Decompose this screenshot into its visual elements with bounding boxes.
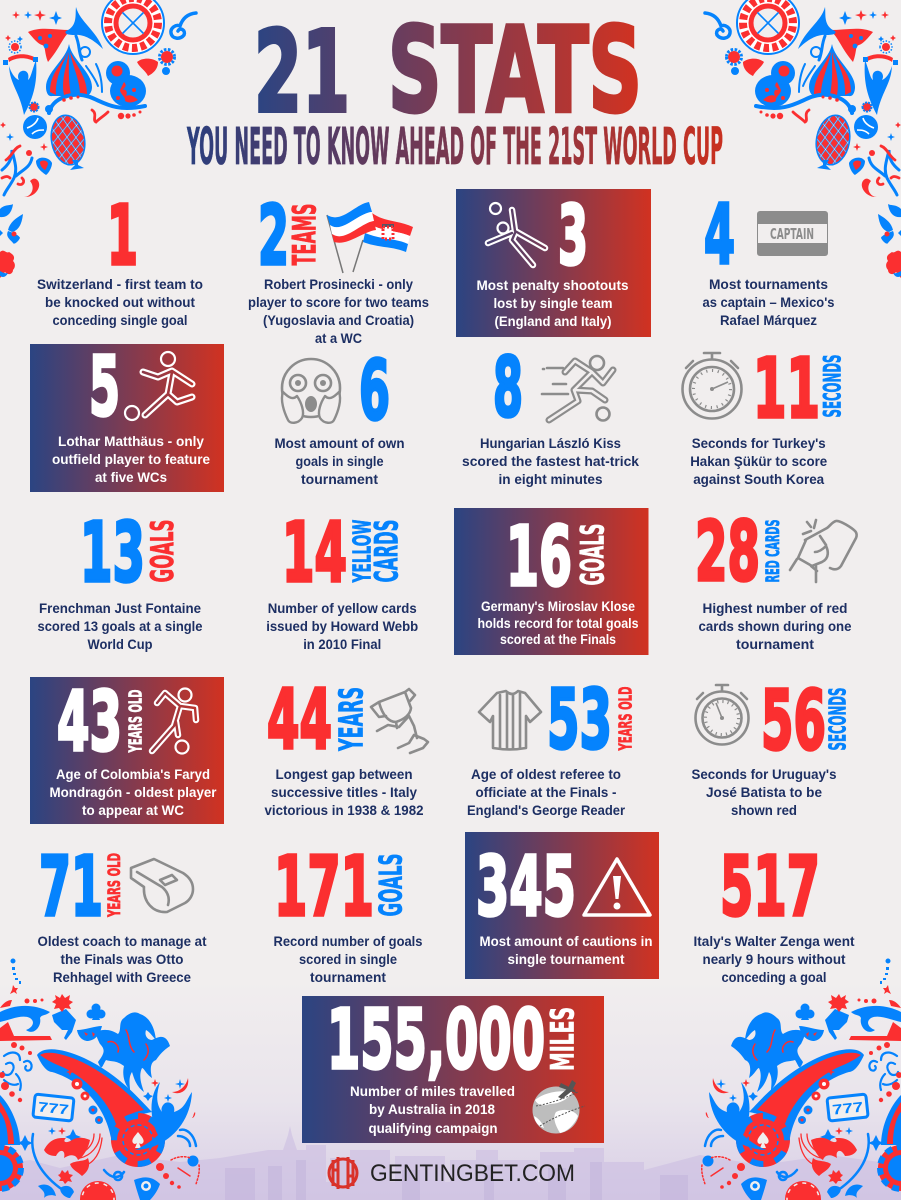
- panel background: [454, 508, 648, 655]
- caption: [264, 766, 424, 818]
- label: yellow cards: YELLOW: [348, 519, 376, 583]
- icon: roulette and dome edge: [0, 1095, 73, 1198]
- city skyline background: [0, 980, 901, 1200]
- caption: Number of yellow cards: [268, 600, 417, 616]
- icon: screaming face: [282, 359, 340, 423]
- logo: GentingBet: [329, 1157, 575, 1189]
- stat 71: [38, 840, 207, 985]
- caption: [462, 435, 639, 487]
- number: 11: 11: [753, 342, 820, 437]
- icon: decorated egg: [47, 113, 89, 170]
- number: 3: 3: [558, 189, 588, 284]
- number: 517: 517: [720, 840, 820, 935]
- caption: Age of Colombia's Faryd: [56, 766, 210, 782]
- caption: Age of oldest referee to: [471, 766, 621, 782]
- icon: fish and flower: [137, 50, 174, 76]
- ornament: bottom right folk-art cluster: [702, 958, 901, 1200]
- stat 1: [37, 189, 203, 328]
- title: 21 STATS: STATS: [388, 1, 642, 139]
- stat 6: [274, 344, 404, 487]
- caption: shown red: [731, 802, 797, 818]
- caption: [702, 276, 835, 328]
- caption: nearly 9 hours without: [702, 951, 846, 967]
- title: 21 STATS: [254, 1, 642, 139]
- panel background: [456, 189, 651, 337]
- caption: Most penalty shootouts: [476, 277, 629, 293]
- caption: Seconds for Turkey's: [692, 435, 826, 451]
- caption: [476, 277, 629, 329]
- caption: Highest number of red: [702, 600, 848, 616]
- stat 28: [695, 505, 857, 652]
- icon: globe with plane: [532, 1080, 585, 1134]
- caption: Most tournaments: [709, 276, 828, 292]
- ornament: bottom left folk-art cluster: [0, 958, 199, 1200]
- ornament: top left folk-art cluster: [0, 0, 196, 278]
- icon: roulette wheel: [102, 0, 164, 54]
- number: 5: 5: [89, 340, 120, 435]
- icon: chips column: [17, 1068, 159, 1151]
- caption: goals in single: [296, 453, 384, 469]
- label: goals: GOALS: [574, 524, 612, 586]
- number: 16: 16: [506, 510, 572, 605]
- caption: [350, 1083, 515, 1136]
- icon: cornucopia: [37, 1049, 152, 1138]
- number: 44: 44: [267, 673, 332, 768]
- icon: eye motifs and dots: [60, 1156, 199, 1200]
- stat 16 panel: [454, 508, 648, 655]
- label: red cards: RED CARDS: [762, 520, 784, 582]
- caption: the Finals was Otto: [60, 951, 184, 967]
- caption: (England and Italy): [494, 313, 612, 329]
- number: 2: 2: [258, 189, 289, 284]
- stat 11: SECONDS: [818, 354, 846, 418]
- icon: fan with raised arms: [3, 41, 38, 115]
- caption: Longest gap between: [276, 766, 412, 782]
- icon: stopwatch: [696, 685, 748, 744]
- number: 71: 71: [39, 840, 103, 935]
- caption: player to score for two teams: [248, 294, 429, 310]
- caption: against South Korea: [693, 471, 824, 487]
- caption: scored in single: [299, 951, 397, 967]
- caption: as captain – Mexico's: [702, 294, 835, 310]
- number: 8: 8: [493, 341, 523, 436]
- stat 8: [462, 341, 639, 487]
- icon: club suit: [86, 1004, 106, 1020]
- caption: Seconds for Uruguay's: [692, 766, 837, 782]
- icon: captain armband: CAPTAIN: [770, 225, 814, 243]
- panel background: [465, 832, 659, 979]
- icon: fan with raised arms: [135, 1078, 196, 1150]
- caption: in eight minutes: [498, 471, 603, 487]
- icon: logo mark: [329, 1157, 357, 1189]
- icon: matryoshka doll: [106, 61, 146, 107]
- icon: slot machine frame: [33, 1094, 74, 1121]
- number: 155,000: 155,000: [327, 993, 545, 1088]
- number: 171: 171: [274, 840, 374, 935]
- caption: [274, 933, 423, 985]
- icon: goalkeeper: [488, 203, 545, 265]
- icon: left swirls: [0, 122, 52, 197]
- caption: Oldest coach to manage at: [38, 933, 207, 949]
- number: 6: 6: [359, 344, 390, 439]
- caption: [694, 933, 855, 985]
- caption: [50, 766, 217, 818]
- icon: running player: [542, 356, 613, 420]
- icon: onion dome: [46, 44, 92, 96]
- icon: ornamental boat: [0, 958, 52, 1041]
- caption: [692, 766, 837, 818]
- caption: [266, 600, 418, 652]
- caption: outfield player to feature: [52, 451, 210, 467]
- caption: be knocked out without: [45, 294, 195, 310]
- label: yellow cards: [348, 520, 406, 583]
- caption: Rehhagel with Greece: [53, 969, 191, 985]
- caption: scored 13 goals at a single: [38, 618, 203, 634]
- label: goals: GOALS: [374, 853, 410, 916]
- caption: conceding single goal: [52, 312, 188, 328]
- icon: swirl: [171, 13, 196, 38]
- stat 4: [702, 188, 835, 328]
- caption: Most amount of cautions in: [480, 933, 652, 949]
- stat 517: [694, 840, 855, 985]
- caption: officiate at the Finals -: [476, 784, 617, 800]
- stat 43 panel: [30, 675, 224, 824]
- caption: José Batista to be: [706, 784, 822, 800]
- caption: tournament: [736, 636, 814, 652]
- icon: stars: [5, 10, 62, 42]
- caption: [480, 933, 652, 967]
- stat 14: [266, 506, 418, 652]
- label: teams: TEAMS: [286, 203, 324, 266]
- number: 28: 28: [695, 505, 760, 600]
- wordmark: GENTINGBET.COM: [370, 1160, 575, 1187]
- caption: issued by Howard Webb: [266, 618, 418, 634]
- caption: tournament: [310, 969, 386, 985]
- caption: Frenchman Just Fontaine: [39, 600, 201, 616]
- caption: qualifying campaign: [368, 1120, 498, 1136]
- slot machine digits left: 777: [37, 1098, 70, 1118]
- caption: Italy's Walter Zenga went: [694, 933, 855, 949]
- stat 3 panel: [456, 189, 651, 337]
- caption: to appear at WC: [82, 802, 184, 818]
- caption: Hakan Şükür to score: [690, 453, 827, 469]
- caption: in 2010 Final: [303, 636, 381, 652]
- caption: holds record for total goals: [478, 615, 639, 631]
- icon: crossed flags: [327, 202, 413, 273]
- icon: stopwatch: [682, 353, 742, 418]
- caption: [37, 276, 203, 328]
- caption: Mondragón - oldest player: [50, 784, 217, 800]
- number: 345: 345: [476, 840, 576, 935]
- caption: successive titles - Italy: [271, 784, 417, 800]
- panel background: [30, 677, 224, 824]
- label: years old: YEARS OLD: [126, 689, 146, 753]
- icon: hand holding card: [790, 520, 857, 582]
- stat 44: [264, 673, 428, 818]
- stat 2: [248, 189, 429, 346]
- label: years old: YEARS OLD: [616, 686, 636, 751]
- number: 14: 14: [282, 506, 347, 601]
- icon: firebird: [28, 7, 103, 62]
- label: yellow cards: CARDS: [368, 519, 406, 582]
- number: 4: 4: [704, 188, 735, 283]
- caption: Number of miles travelled: [350, 1083, 515, 1099]
- caption: [478, 598, 639, 647]
- caption: Lothar Matthäus - only: [58, 433, 204, 449]
- caption: England's George Reader: [467, 802, 626, 818]
- icon: spades and arrows: [44, 1134, 102, 1176]
- stat 53: [467, 673, 636, 818]
- icon: hands lifting trophy: [371, 689, 428, 753]
- icon: poker chip: [111, 1113, 165, 1167]
- caption: [698, 600, 852, 652]
- icon: man with cube: [52, 994, 76, 1040]
- number: 53: 53: [547, 673, 612, 768]
- stat 56: [692, 674, 852, 818]
- caption: conceding a goal: [722, 969, 826, 985]
- icon: curl cluster: [0, 1042, 32, 1102]
- caption: by Australia in 2018: [369, 1101, 495, 1117]
- caption: Hungarian László Kiss: [480, 435, 621, 451]
- number: 56: 56: [761, 674, 826, 769]
- caption: Most amount of own: [274, 435, 404, 451]
- caption: [38, 933, 207, 985]
- caption: World Cup: [88, 636, 152, 652]
- caption: scored the fastest hat-trick: [462, 453, 639, 469]
- stat 13: [38, 506, 203, 652]
- caption: (Yugoslavia and Croatia): [263, 312, 414, 328]
- caption: [690, 435, 827, 487]
- panel background: [302, 996, 604, 1143]
- number: 43: 43: [57, 675, 122, 770]
- icon: player kicking ball: [125, 352, 192, 420]
- label: goals: GOALS: [145, 519, 181, 582]
- stat 155,000 panel: [302, 993, 604, 1143]
- caption: tournament: [301, 471, 378, 487]
- icon: bottom chip: [80, 1181, 116, 1200]
- caption: [52, 433, 210, 485]
- caption: at a WC: [315, 330, 362, 346]
- caption: [467, 766, 626, 818]
- number: 1: 1: [107, 189, 138, 284]
- caption: at five WCs: [95, 469, 167, 485]
- caption: Switzerland - first team to: [37, 276, 203, 292]
- stat 345 panel: [465, 832, 659, 979]
- title: 21 STATS: 21: [254, 8, 350, 138]
- label: miles: MILES: [544, 1007, 582, 1071]
- panel background: [30, 344, 224, 492]
- number: 13: 13: [80, 506, 145, 601]
- ornament: top right folk-art cluster: [705, 0, 901, 278]
- icon: referee shirt: [479, 691, 541, 750]
- label: years: YEARS: [332, 687, 370, 752]
- icon: horses: [77, 1012, 170, 1092]
- caption: [38, 600, 203, 652]
- icon: player with ball: [152, 688, 196, 754]
- slot machine digits right: 777: [831, 1098, 864, 1118]
- icon: lower left motifs: [0, 204, 23, 278]
- caption: lost by single team: [494, 295, 612, 311]
- caption: Rafael Márquez: [720, 312, 817, 328]
- stat 171: [274, 840, 423, 985]
- label: years old: YEARS OLD: [105, 853, 125, 918]
- caption: victorious in 1938 & 1982: [264, 802, 424, 818]
- caption: Germany's Miroslav Klose: [481, 598, 635, 614]
- caption: Robert Prosinecki - only: [264, 276, 413, 292]
- icon: whistle: [131, 859, 193, 912]
- caption: scored at the Finals: [500, 631, 616, 647]
- label: seconds: SECONDS: [826, 688, 852, 750]
- icon: stylised ball: [23, 115, 47, 139]
- stat 11: [682, 342, 846, 487]
- icon: warning triangle: [584, 859, 650, 915]
- stat 5 panel: [30, 340, 224, 492]
- caption: single tournament: [508, 951, 625, 967]
- caption: Record number of goals: [274, 933, 423, 949]
- caption: [274, 435, 404, 487]
- caption: [248, 276, 429, 346]
- caption: cards shown during one: [698, 618, 852, 634]
- icon: ornamental band: [30, 64, 145, 122]
